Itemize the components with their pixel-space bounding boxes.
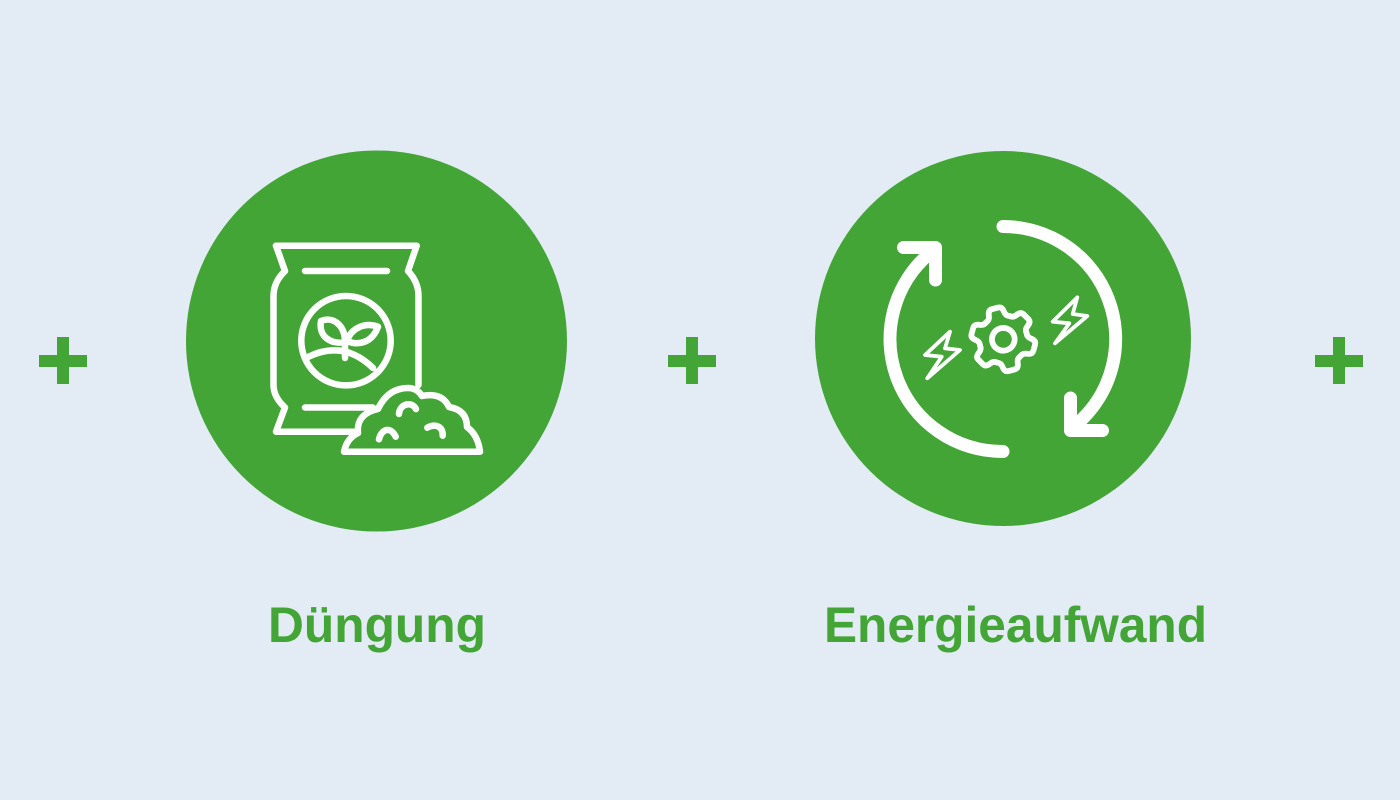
panel: Düngung icon [186, 150, 567, 532]
heading: Energieaufwand: Energieaufwand [824, 597, 1207, 653]
icon: fertilizer bag [274, 246, 418, 432]
panel: Energieaufwand icon [815, 151, 1191, 526]
green circle: Energieaufwand [815, 151, 1191, 526]
heading: Düngung: Düngung [268, 597, 486, 653]
icon: gear [962, 300, 1044, 379]
icon: lightning right [1053, 297, 1087, 343]
icon: plus middle [668, 337, 716, 384]
icon: lightning left [925, 332, 960, 378]
green circle: Düngung [186, 150, 567, 532]
icon: plus left [39, 337, 87, 384]
icon: plus right [1315, 337, 1363, 384]
icon: cycle arrows [890, 226, 1116, 452]
icon: soil pile [344, 388, 480, 452]
